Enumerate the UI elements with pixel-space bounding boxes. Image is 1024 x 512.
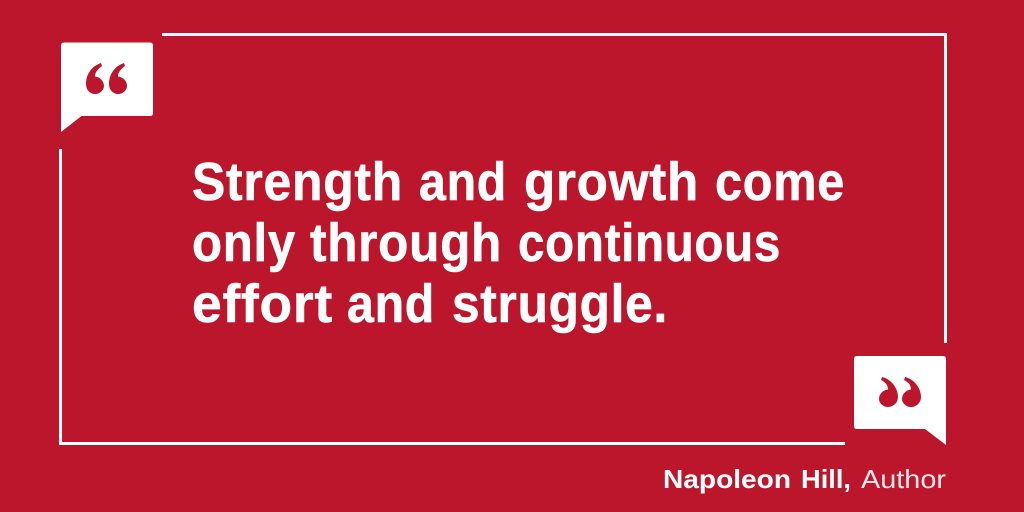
icon: opening quote bubble [61,42,153,132]
attribution [663,464,946,494]
attribution: Napoleon [663,464,791,494]
attribution: Hill, [801,464,851,494]
quote text: come [715,152,845,212]
icon: closing quote bubble [854,356,946,445]
quote text: only [192,213,296,273]
quote text: continuous [518,213,781,273]
white frame [59,33,947,445]
quote text [192,152,845,334]
quote text: struggle. [452,274,668,334]
quote text: and [347,274,435,334]
quote text: growth [524,152,699,212]
quote text: Strength [192,152,403,212]
quote text: through [310,213,502,273]
attribution: Author [861,464,946,494]
quote text: effort [192,274,333,334]
quote text: and [419,152,507,212]
